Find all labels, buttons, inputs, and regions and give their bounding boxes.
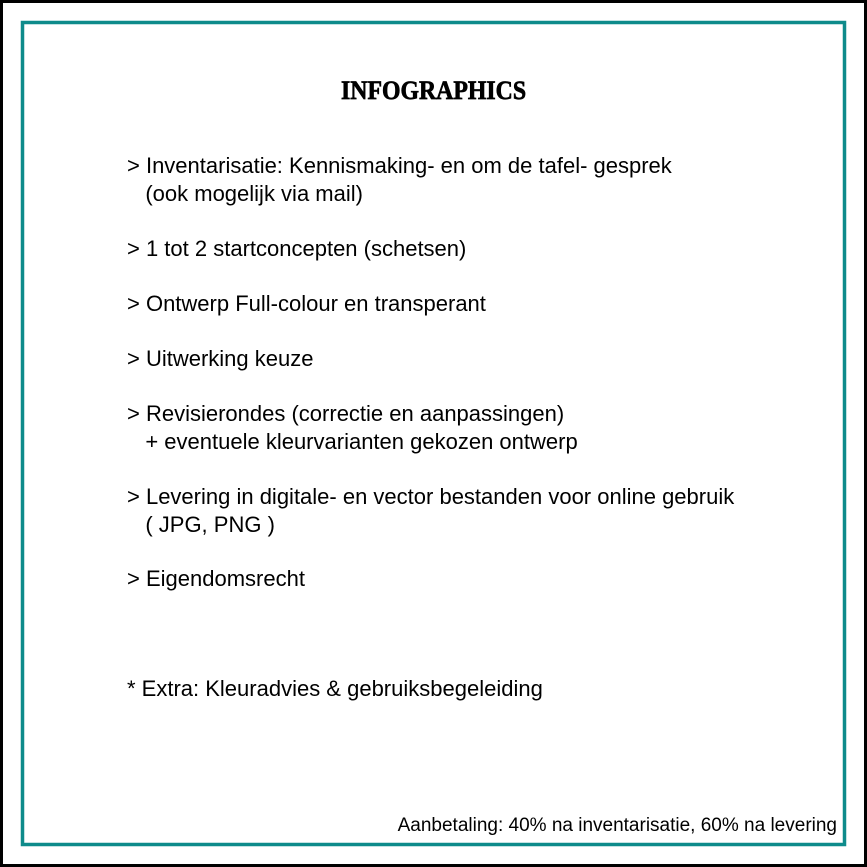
text block: ontwerp: > Ontwerp Full-colour en transperant xyxy=(127,291,486,316)
text block: levering: > Levering in digitale- en vector bestanden voor online gebruik ( JPG, PNG ) xyxy=(127,484,734,536)
text block: uitwerking: > Uitwerking keuze xyxy=(127,346,313,371)
payment note: Aanbetaling: 40% na inventarisatie, 60% na levering xyxy=(398,815,837,836)
text block: revisierondes: > Revisierondes (correctie en aanpassingen) + eventuele kleurvarianten gekozen ontwerp xyxy=(127,401,578,454)
text block: extra: * Extra: Kleuradvies & gebruiksbegeleiding xyxy=(127,676,543,701)
text block: startconcepten: > 1 tot 2 startconcepten (schetsen) xyxy=(127,236,466,261)
text block: inventarisatie: > Inventarisatie: Kennismaking- en om de tafel- gesprek (ook mogelijk via mail) xyxy=(127,153,672,206)
title: INFOGRAPHICS xyxy=(341,76,526,105)
text block: eigendomsrecht: > Eigendomsrecht xyxy=(127,566,305,591)
